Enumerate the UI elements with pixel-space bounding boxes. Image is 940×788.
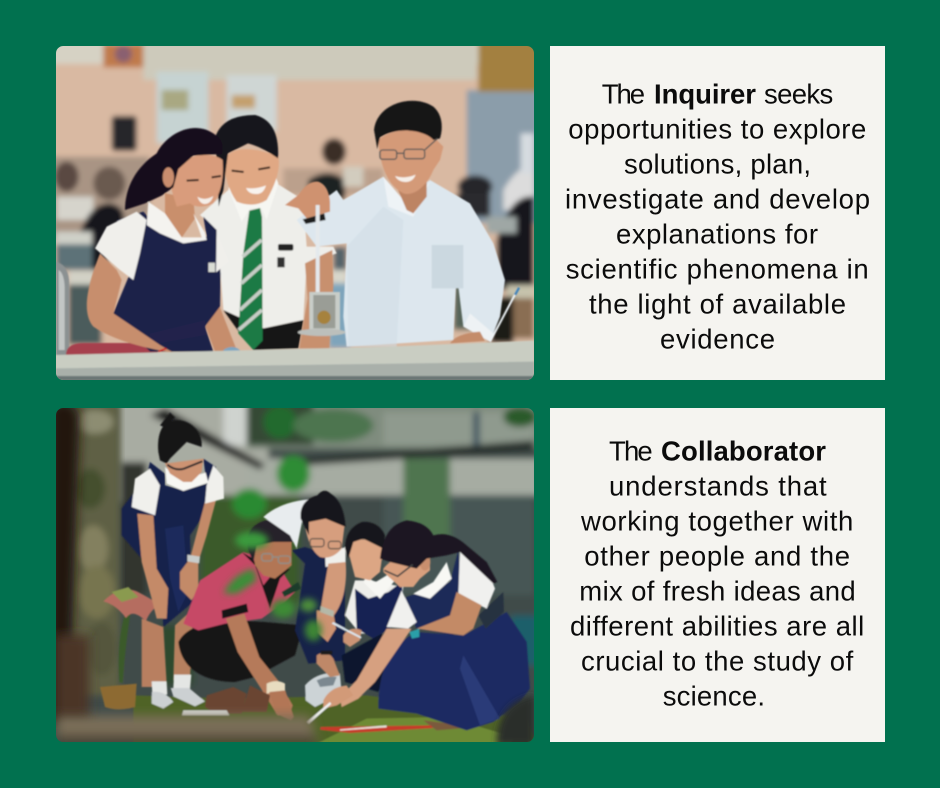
text block: collaborator description: other people and the xyxy=(584,541,850,572)
text block: inquirer description xyxy=(565,78,870,354)
tree trunk xyxy=(70,402,120,695)
student leaning over xyxy=(292,547,345,664)
teacher xyxy=(297,177,505,347)
rod and beaker experiment xyxy=(316,205,320,293)
text block: inquirer description: scientific phenomena in xyxy=(566,253,869,284)
text block: collaborator description: different abilities are all xyxy=(570,611,864,642)
text block: inquirer description: Inquirer xyxy=(654,78,756,109)
text block: collaborator description: mix of fresh ideas and xyxy=(579,576,856,607)
text block: inquirer description: opportunities to explore xyxy=(568,113,866,144)
text block: collaborator description: crucial to the study of xyxy=(581,646,854,677)
text block: collaborator description: science. xyxy=(663,681,765,712)
sample bag xyxy=(305,673,342,707)
panel: collaborator description xyxy=(550,408,885,742)
student crouching in front xyxy=(378,612,530,730)
younger student in the middle xyxy=(345,580,403,634)
ground xyxy=(133,695,537,745)
text block: collaborator description: The xyxy=(609,436,653,467)
text block: collaborator description xyxy=(570,436,864,712)
photo: teacher and students examining samples outdoors xyxy=(56,408,534,742)
potted plant xyxy=(119,602,132,683)
text block: inquirer description: the light of available xyxy=(589,288,846,319)
text block: collaborator description: working together with xyxy=(580,506,853,537)
text block: inquirer description: seeks xyxy=(764,78,833,109)
foreground blurred leaves xyxy=(235,532,268,549)
photo: teacher and two students with a lab experiment xyxy=(56,46,534,380)
red ruler on ground xyxy=(320,725,433,733)
student in navy pinafore xyxy=(206,303,237,352)
text block: inquirer description: solutions, plan, xyxy=(624,148,811,179)
student in white shirt xyxy=(200,183,337,328)
text block: inquirer description: explanations for xyxy=(616,218,818,249)
text block: inquirer description: investigate and develop xyxy=(565,183,870,214)
text block: collaborator description: understands that xyxy=(609,471,827,502)
text block: collaborator description: Collaborator xyxy=(661,436,826,467)
counter top xyxy=(56,340,534,369)
panel: inquirer description xyxy=(550,46,885,380)
standing student xyxy=(142,619,167,687)
metal pole and red bag xyxy=(56,262,69,355)
text block: inquirer description: The xyxy=(602,78,645,109)
teacher in pink shirt xyxy=(178,621,303,682)
text block: inquirer description: evidence xyxy=(660,323,775,354)
